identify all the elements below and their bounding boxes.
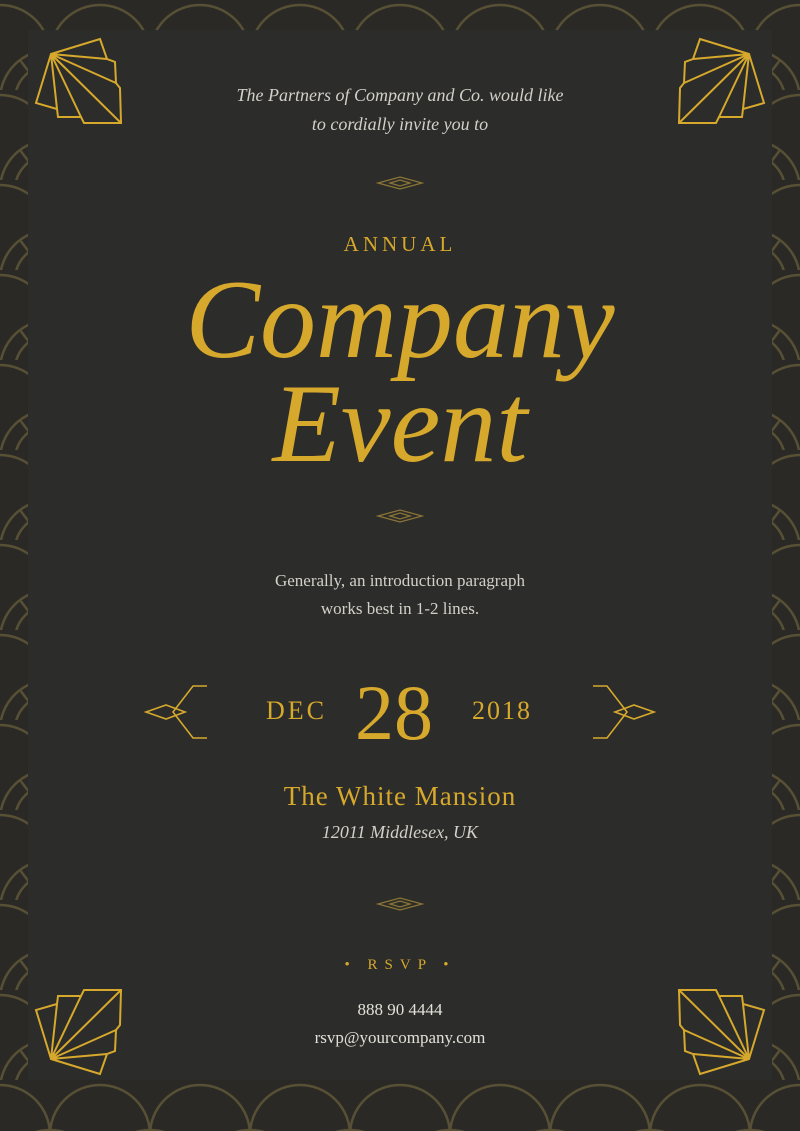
text: intro paragraph bbox=[275, 571, 525, 618]
title: company event: Company bbox=[185, 258, 615, 382]
text: intro bbox=[236, 85, 564, 134]
text: intro: The Partners of Company and Co. would like bbox=[236, 85, 564, 105]
text: intro paragraph: works best in 1-2 lines. bbox=[321, 599, 479, 618]
date: 2018 bbox=[472, 696, 532, 725]
heading: annual: ANNUAL bbox=[344, 232, 456, 256]
address: 12011 Middlesex, UK bbox=[322, 822, 478, 842]
contact: 888 90 4444 bbox=[358, 1000, 442, 1019]
date: DEC bbox=[266, 696, 327, 725]
venue: The White Mansion bbox=[284, 781, 516, 811]
heading: rsvp: • RSVP • bbox=[345, 957, 455, 973]
contact bbox=[314, 1000, 486, 1047]
title: company event bbox=[185, 258, 615, 486]
title: company event: Event bbox=[273, 362, 527, 486]
date: 28 bbox=[355, 669, 433, 756]
date bbox=[266, 669, 532, 756]
text: intro: to cordially invite you to bbox=[312, 114, 488, 134]
contact: rsvp@yourcompany.com bbox=[315, 1028, 485, 1047]
text: intro paragraph: Generally, an introduction paragraph bbox=[275, 571, 525, 590]
